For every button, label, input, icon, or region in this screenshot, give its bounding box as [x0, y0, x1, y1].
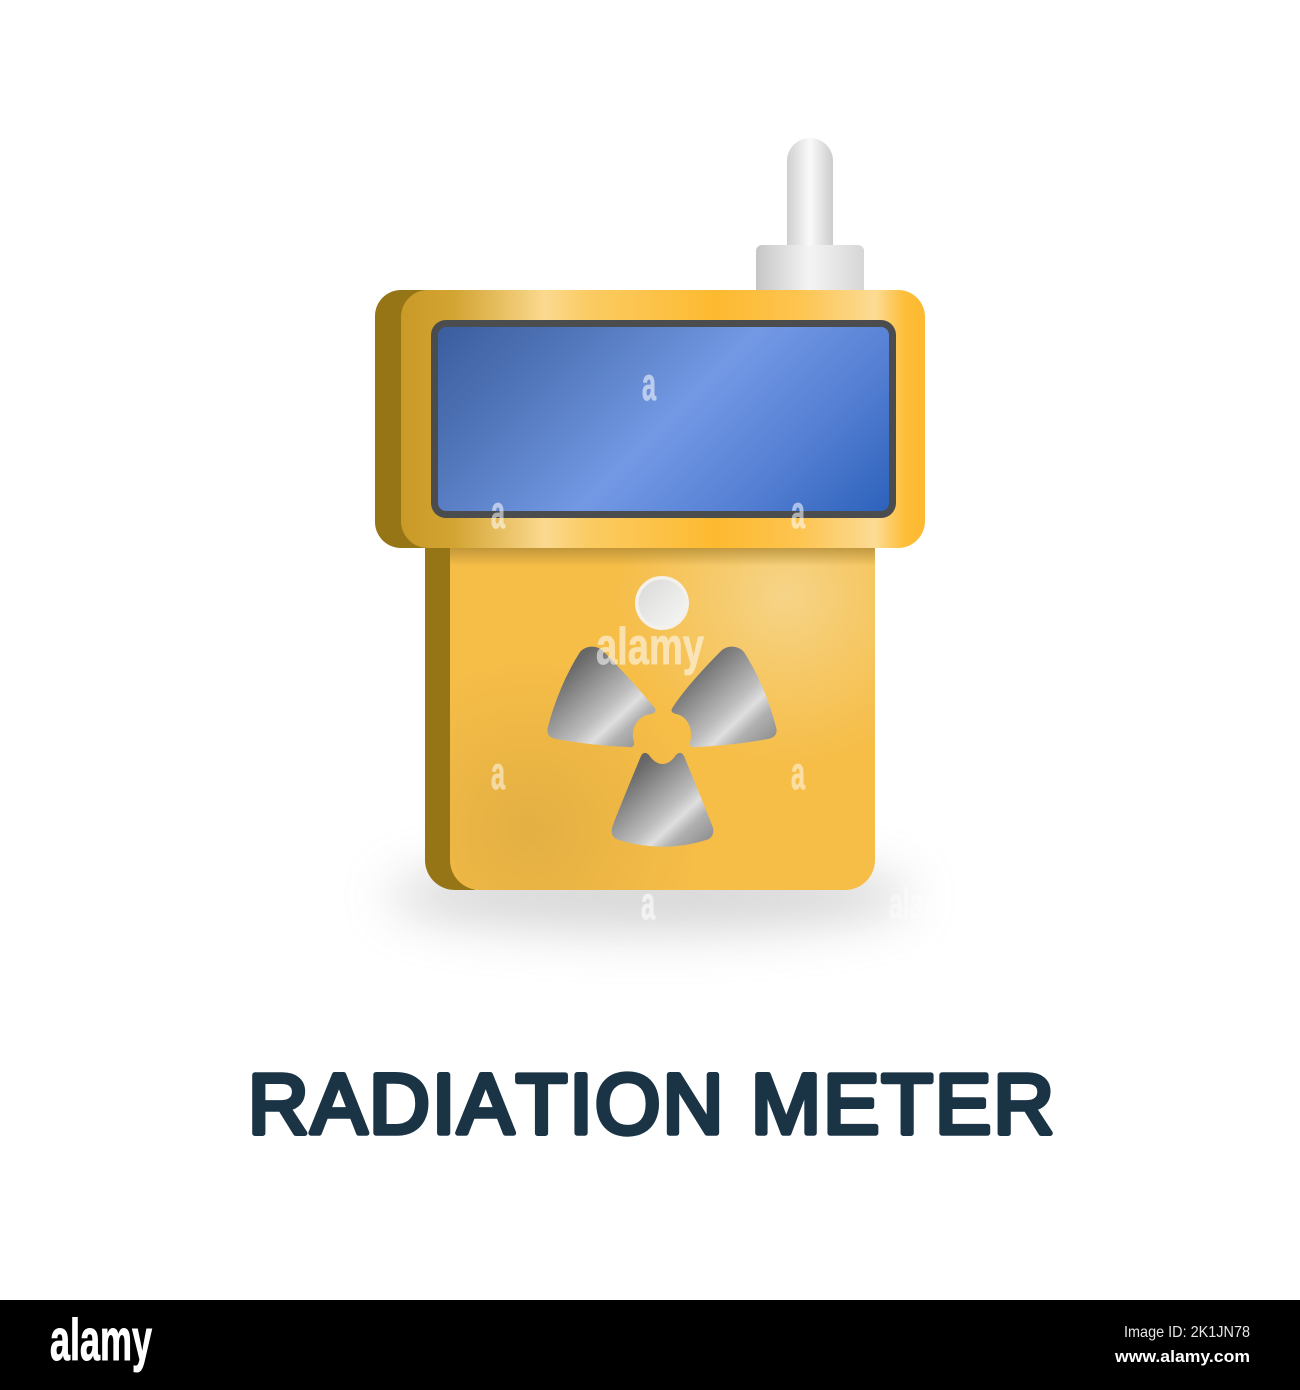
watermarks: a [641, 877, 655, 929]
watermarks: a [491, 486, 505, 538]
footer bar [0, 1300, 1300, 1390]
antenna [756, 138, 864, 292]
website: www.alamy.com [1114, 1347, 1250, 1366]
display screen [431, 320, 896, 518]
image id: Image ID: 2K1JN78 [1124, 1324, 1250, 1341]
title: RADIATION METER [248, 1057, 1054, 1151]
indicator button [635, 576, 689, 630]
watermarks: a [791, 747, 805, 799]
watermarks: alamy [596, 618, 704, 676]
upper housing [375, 290, 925, 548]
watermarks [491, 358, 959, 929]
ground shadow [388, 860, 912, 932]
watermarks: a [491, 747, 505, 799]
watermarks: a [642, 358, 656, 410]
radiation trefoil symbol [547, 647, 777, 847]
watermarks: alamy [889, 879, 959, 928]
footer logo: alamy [50, 1308, 152, 1373]
radiation meter illustration [375, 138, 925, 932]
lower body [425, 540, 875, 890]
watermarks: a [791, 486, 805, 538]
